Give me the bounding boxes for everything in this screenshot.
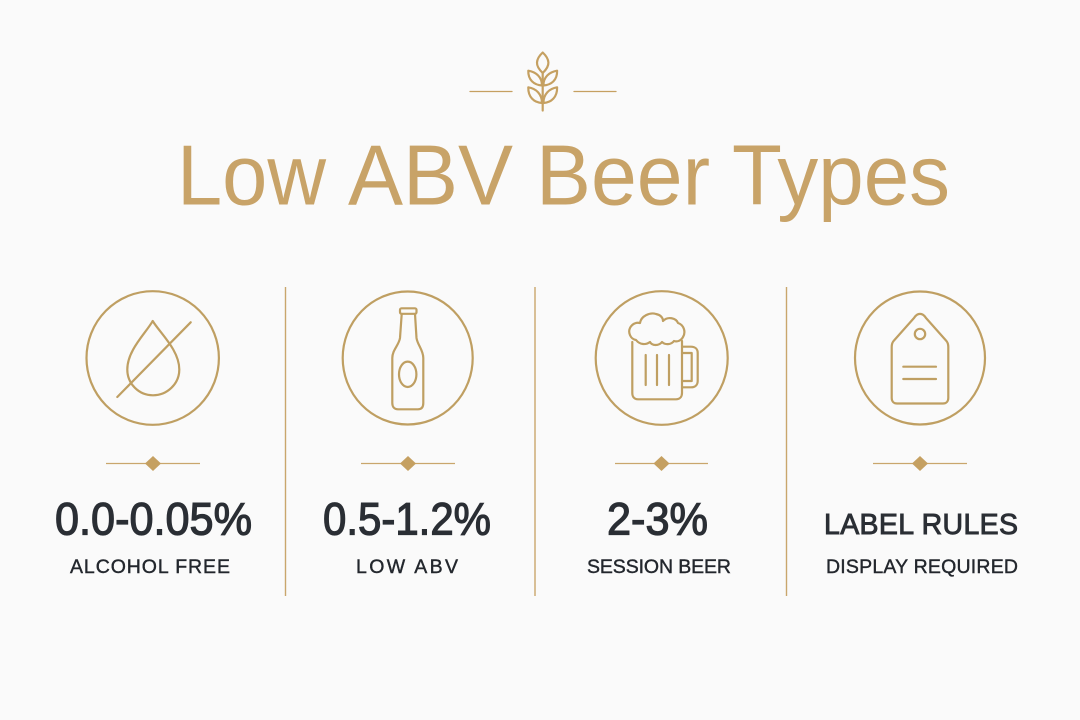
panel: alcohol free [55, 291, 252, 578]
label: SESSION BEER [587, 556, 731, 578]
icon: bottle [343, 292, 473, 424]
value: LABEL RULES [824, 509, 1018, 541]
title: Types [732, 128, 950, 224]
separator [615, 456, 708, 471]
panel: low abv [323, 292, 491, 578]
title: Low [177, 128, 327, 224]
label: DISPLAY REQUIRED [826, 556, 1018, 578]
icon: crossed out drop [86, 291, 219, 425]
value: 2-3% [607, 494, 708, 544]
title [177, 128, 950, 224]
icon: beer mug [596, 291, 728, 425]
separator [873, 456, 967, 471]
value: 0.0-0.05% [55, 494, 252, 544]
panel: label rules [824, 292, 1018, 578]
icon: hang tag [855, 292, 985, 424]
title: Beer [536, 128, 710, 224]
column dividers [286, 287, 786, 596]
separator [106, 456, 200, 471]
title: ABV [348, 128, 513, 224]
panel: session beer [587, 291, 731, 578]
separator [361, 456, 455, 471]
icon: wheat ornament [470, 52, 616, 110]
label: LOW ABV [356, 556, 458, 578]
label: ALCOHOL FREE [70, 556, 230, 578]
value: 0.5-1.2% [323, 494, 491, 544]
